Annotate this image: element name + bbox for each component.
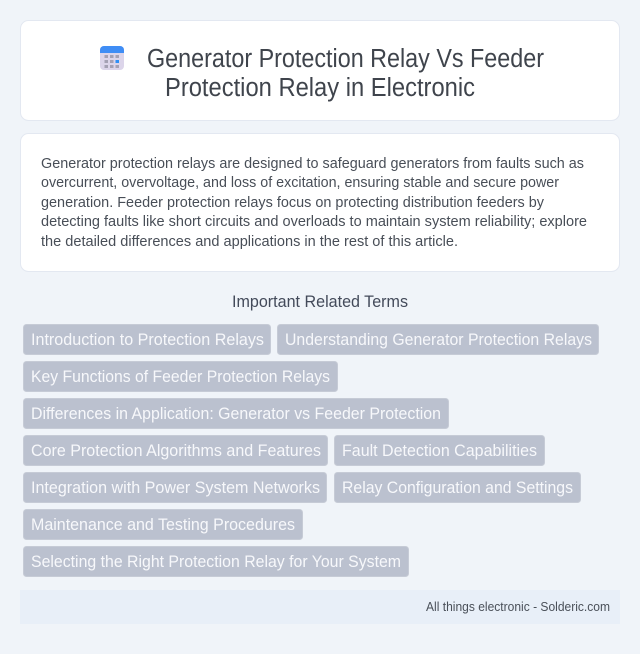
tag: integration: Integration with Power System Networks xyxy=(31,479,320,497)
intro text panel xyxy=(20,134,620,272)
tag: selecting: Selecting the Right Protection Relay for Your System xyxy=(31,553,401,571)
tag: configuration xyxy=(334,472,580,502)
tag: differences: Differences in Application: Generator vs Feeder Protection xyxy=(31,405,441,423)
intro text panel: Generator protection relays are designed to safeguard generators from faults such as xyxy=(41,155,584,172)
title xyxy=(147,45,544,102)
tag: algorithms: Core Protection Algorithms and Features xyxy=(31,442,321,460)
tag: maintenance xyxy=(24,510,302,540)
tag: introduction xyxy=(24,324,270,354)
tag: differences xyxy=(24,398,448,428)
related terms heading: Important Related Terms xyxy=(232,293,408,311)
icon: calendar xyxy=(100,46,124,70)
tag: integration xyxy=(24,472,326,502)
intro text panel: generation. Feeder protection relays focus on protecting distribution feeders by xyxy=(41,194,544,211)
tag: maintenance: Maintenance and Testing Procedures xyxy=(31,516,295,534)
tag: algorithms xyxy=(24,436,328,466)
tag: fault detection: Fault Detection Capabilities xyxy=(342,442,537,460)
tag: generator relays: Understanding Generator Protection Relays xyxy=(285,331,592,349)
tag: configuration: Relay Configuration and Settings xyxy=(342,479,573,497)
footer: All things electronic - Solderic.com xyxy=(426,600,610,614)
intro text panel: detecting faults like short circuits and overloads to maintain system reliability; explore xyxy=(41,213,587,230)
related terms tags xyxy=(24,324,598,576)
footer xyxy=(20,590,620,624)
tag: selecting xyxy=(24,546,408,576)
title: Protection Relay in Electronic xyxy=(165,74,475,102)
intro text panel: overcurrent, overvoltage, and loss of excitation, ensuring stable and secure power xyxy=(41,174,559,191)
intro text panel: the detailed differences and applications in the rest of this article. xyxy=(41,233,458,250)
tag: feeder functions xyxy=(24,362,338,392)
tag: generator relays xyxy=(278,324,598,354)
tag: fault detection xyxy=(334,436,544,466)
header panel xyxy=(20,20,620,120)
tag: introduction: Introduction to Protection Relays xyxy=(31,331,264,349)
title: Generator Protection Relay Vs Feeder xyxy=(147,45,544,73)
tag: feeder functions: Key Functions of Feeder Protection Relays xyxy=(31,368,330,386)
